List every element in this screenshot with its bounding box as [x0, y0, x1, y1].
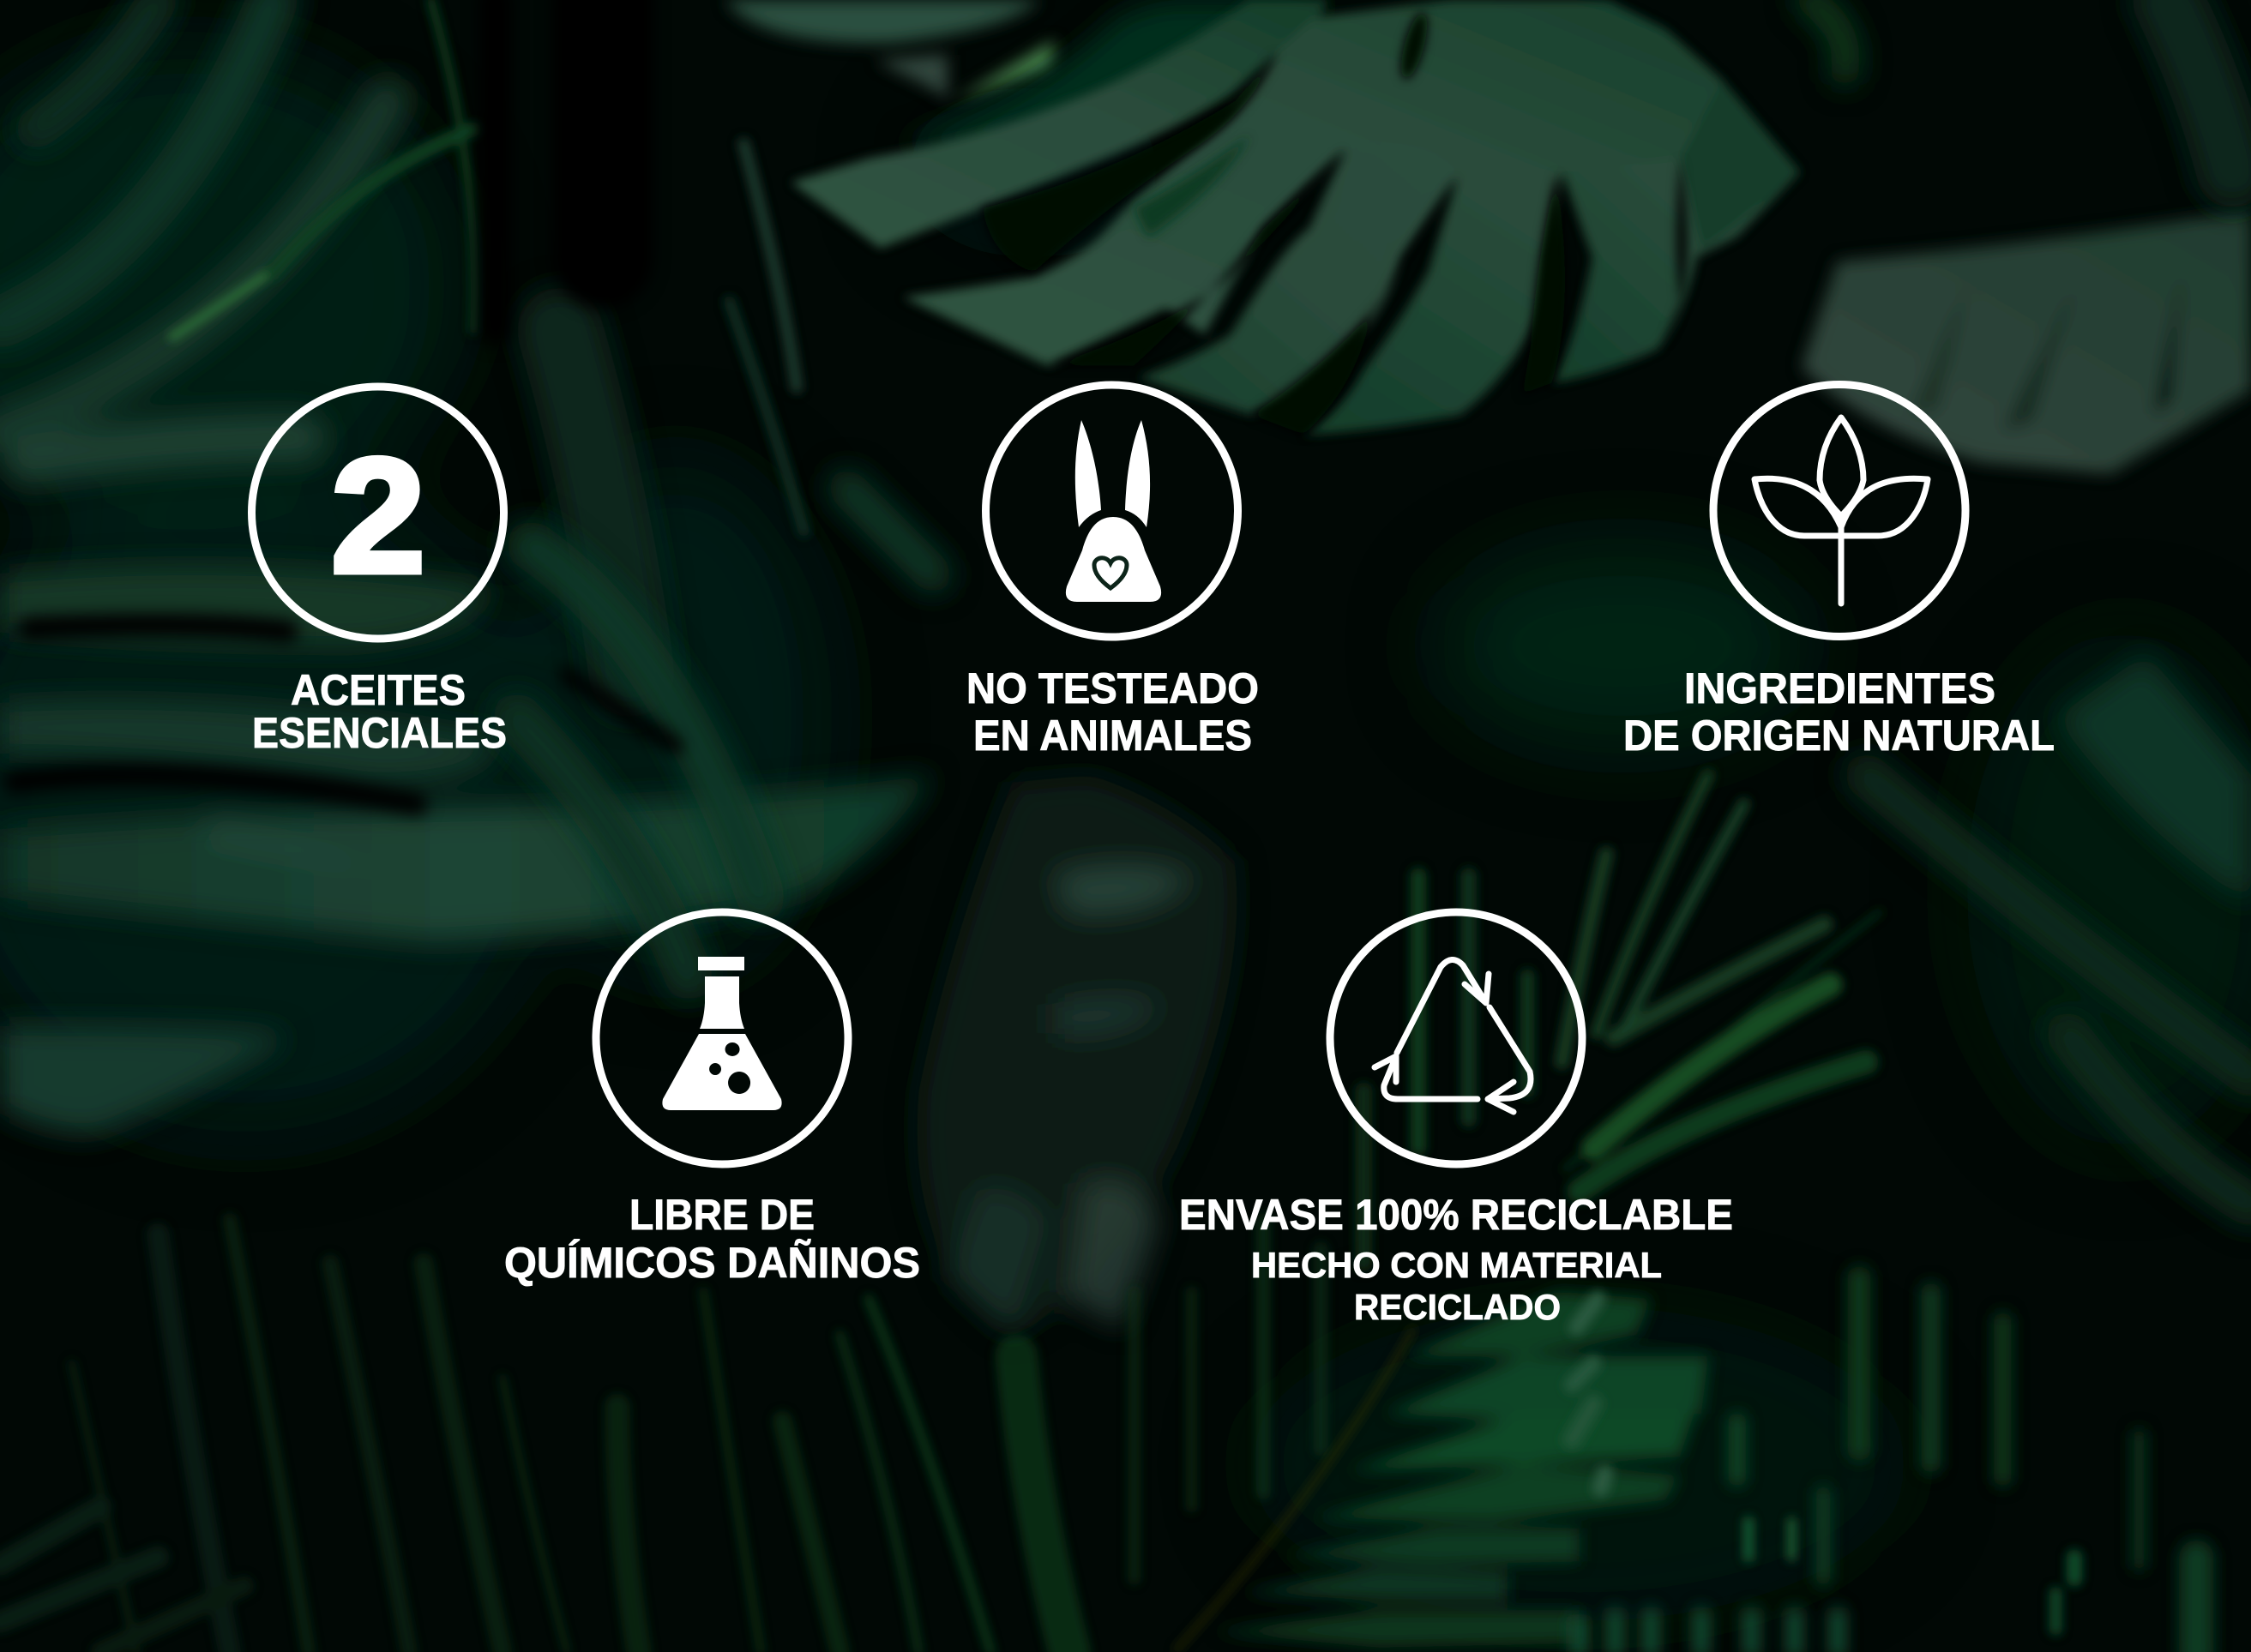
- middle palm: [1363, 775, 1881, 1263]
- fern stem: [1174, 1328, 1414, 1652]
- icon: recycle triangle badge: [1330, 912, 1582, 1164]
- icon: plant badge: [1713, 384, 1965, 636]
- centre leaf with grey streaks: [917, 775, 1237, 1335]
- label: ingredientes de origen natural: [1623, 664, 2055, 760]
- label: hecho con material reciclado: RECICLADO: [1354, 1287, 1561, 1327]
- label: hecho con material reciclado: [1251, 1245, 1662, 1327]
- label: no testeado en animales: NO TESTEADO: [966, 664, 1259, 712]
- feature: envase reciclable: [1179, 912, 1733, 1239]
- fern tips: [1572, 1299, 2074, 1629]
- bottom-right fern: [1174, 1277, 2196, 1652]
- feature: no testeado en animales: [966, 385, 1259, 760]
- feature: aceites esenciales: [252, 387, 507, 757]
- label: hecho con material reciclado: HECHO CON MATERIAL: [1251, 1245, 1662, 1285]
- top pale blob and bright sliver: [725, 0, 1055, 100]
- monstera slits: [982, 10, 1688, 435]
- icon: flask badge: [596, 912, 848, 1164]
- icon: rabbit badge: [986, 385, 1238, 637]
- left monstera lobes: [0, 566, 933, 1134]
- bottom palm blades: [0, 1220, 1321, 1652]
- monstera fingers: [791, 0, 1800, 435]
- label: no testeado en animales: [966, 664, 1259, 760]
- icon: number 2 badge: [252, 387, 504, 639]
- label: envase 100% reciclable: ENVASE 100% RECICLABLE: [1179, 1191, 1733, 1239]
- monstera leaf: [791, 0, 1800, 435]
- feature: ingredientes naturales: [1623, 384, 2055, 760]
- left inner fronds: [517, 488, 933, 976]
- pale right leaf: [1802, 209, 2251, 473]
- upper-left dark fronds: [0, 0, 632, 675]
- label: aceites esenciales: ACEITES: [291, 666, 466, 714]
- feature: libre de quimicos: [504, 912, 920, 1287]
- label: libre de quimicos danios: LIBRE DE: [629, 1191, 815, 1239]
- label: no testeado en animales: EN ANIMALES: [973, 712, 1252, 760]
- right leaves: [1809, 0, 2251, 1205]
- label: libre de quimicos danios: QUÍMICOS DAÑINOS: [504, 1239, 920, 1287]
- fern blades: [1213, 1292, 1708, 1648]
- label: ingredientes de origen natural: DE ORIGEN NATURAL: [1623, 712, 2055, 760]
- label: aceites esenciales: ESENCIALES: [252, 709, 507, 757]
- monstera shadow lobe: [897, 0, 1328, 151]
- fern right leaflets: [1580, 1277, 2196, 1652]
- label: libre de quimicos danios: [504, 1191, 920, 1287]
- label: aceites esenciales: [252, 666, 507, 757]
- label: ingredientes de origen natural: INGREDIENTES: [1684, 664, 1995, 712]
- icon: number 2 badge: 2: [331, 425, 425, 607]
